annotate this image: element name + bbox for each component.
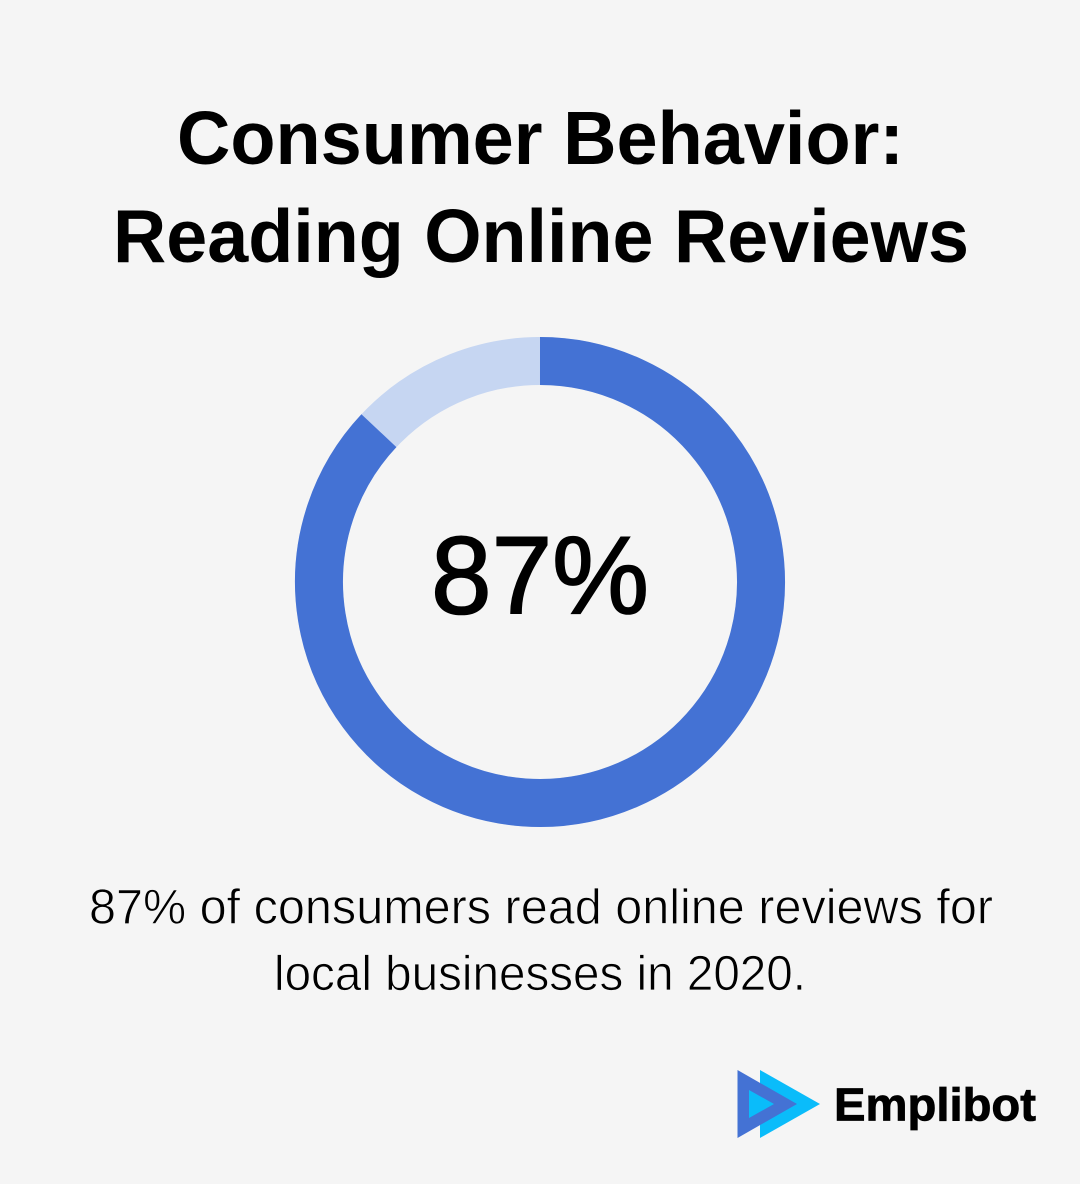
logo wordmark: Emplibot [834,1078,1036,1130]
description text: local businesses in 2020. [274,947,806,1001]
donut chart: 87 percent [319,361,761,803]
icon: play triangles [738,1070,820,1138]
description text: 87% of consumers read online reviews for [89,880,993,934]
donut value: 87% [431,514,649,638]
logo: Emplibot [738,1070,1036,1138]
title [113,96,969,278]
title: Reading Online Reviews [113,194,969,278]
title: Consumer Behavior: [177,96,904,180]
description text [89,880,993,1001]
